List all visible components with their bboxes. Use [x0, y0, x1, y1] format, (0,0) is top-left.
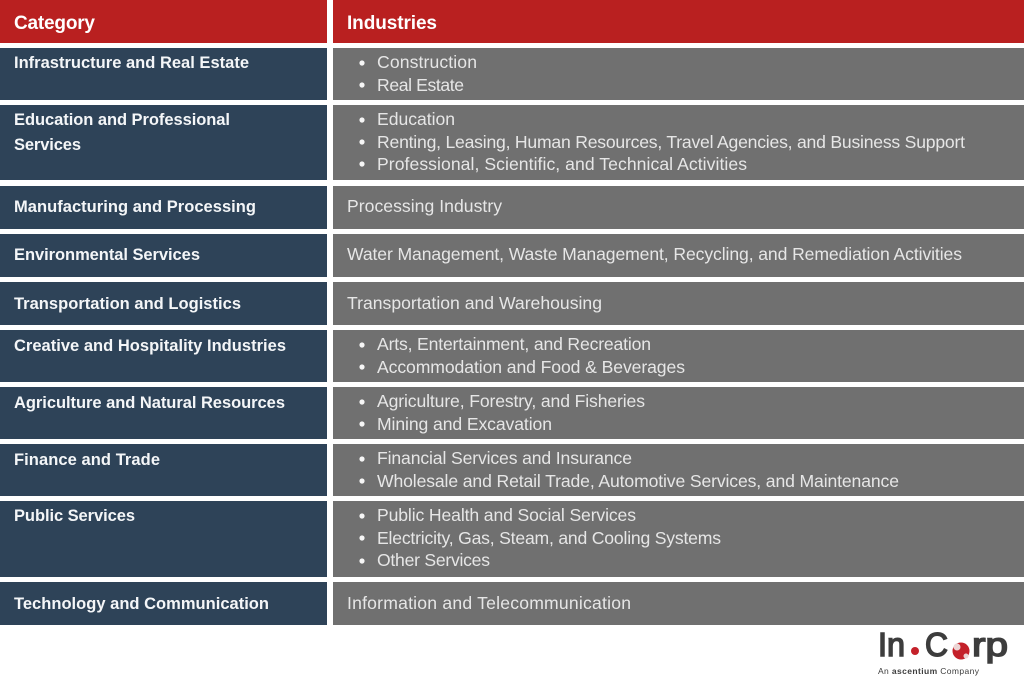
row: Transportation and Logistics: Transportation and Warehousing — [347, 293, 602, 313]
logo: InCorp: C — [925, 626, 948, 663]
logo: InCorp: rp — [972, 626, 1008, 663]
row: Finance and Trade: Wholesale and Retail Trade, Automotive Services, and Maintenance — [377, 471, 899, 491]
row: Education and Professional Services: Services — [14, 136, 81, 154]
row: Education and Professional Services: Professional, Scientific, and Technical Activities — [377, 154, 747, 174]
row: Technology and Communication: Information and Telecommunication — [347, 593, 631, 613]
logo: InCorp — [878, 626, 1008, 676]
heading: Industries: Industries — [347, 13, 437, 34]
row: Transportation and Logistics: Transportation and Logistics — [14, 295, 241, 313]
logo: InCorp: In — [878, 626, 905, 663]
row: Agriculture and Natural Resources: Agriculture and Natural Resources — [14, 394, 285, 412]
row: Creative and Hospitality Industries — [0, 330, 1024, 382]
header row — [0, 0, 1024, 43]
row: Agriculture and Natural Resources: Agriculture, Forestry, and Fisheries — [377, 391, 645, 411]
row: Transportation and Logistics — [0, 282, 1024, 325]
row: Infrastructure and Real Estate: Real Estate — [377, 75, 464, 95]
row: Creative and Hospitality Industries: Arts, Entertainment, and Recreation — [377, 334, 651, 354]
row: Public Services — [0, 501, 1024, 577]
row: Finance and Trade — [0, 444, 1024, 496]
row: Education and Professional Services — [0, 105, 1024, 180]
row: Finance and Trade: Financial Services and Insurance — [377, 448, 632, 468]
row: Finance and Trade: Finance and Trade — [14, 451, 160, 469]
row: Public Services: Public Health and Social Services — [377, 505, 636, 525]
row: Environmental Services — [0, 234, 1024, 277]
row: Technology and Communication: Technology and Communication — [14, 595, 269, 613]
row: Agriculture and Natural Resources — [0, 387, 1024, 439]
row: Public Services: Public Services — [14, 507, 135, 525]
row: Education and Professional Services: Renting, Leasing, Human Resources, Travel Agencies, and Business Support — [377, 132, 965, 152]
row: Manufacturing and Processing — [0, 186, 1024, 229]
row: Creative and Hospitality Industries: Creative and Hospitality Industries — [14, 337, 286, 355]
row: Public Services: Electricity, Gas, Steam, and Cooling Systems — [377, 528, 721, 548]
row: Creative and Hospitality Industries: Accommodation and Food & Beverages — [377, 357, 685, 377]
row: Infrastructure and Real Estate: Infrastructure and Real Estate — [14, 54, 249, 72]
row: Education and Professional Services: Education — [377, 109, 455, 129]
row: Technology and Communication — [0, 582, 1024, 625]
logo: InCorp: An ascentium Company — [878, 666, 980, 676]
row: Infrastructure and Real Estate — [0, 48, 1024, 100]
row: Agriculture and Natural Resources: Mining and Excavation — [377, 414, 552, 434]
row: Public Services: Other Services — [377, 550, 490, 570]
row: Education and Professional Services: Education and Professional — [14, 111, 230, 129]
heading: Category: Category — [14, 13, 95, 34]
row: Environmental Services: Environmental Services — [14, 246, 200, 264]
row: Manufacturing and Processing: Manufacturing and Processing — [14, 198, 256, 216]
row: Environmental Services: Water Management, Waste Management, Recycling, and Remediation Activities — [347, 244, 962, 264]
row: Infrastructure and Real Estate: Construction — [377, 52, 477, 72]
row: Manufacturing and Processing: Processing Industry — [347, 196, 502, 216]
